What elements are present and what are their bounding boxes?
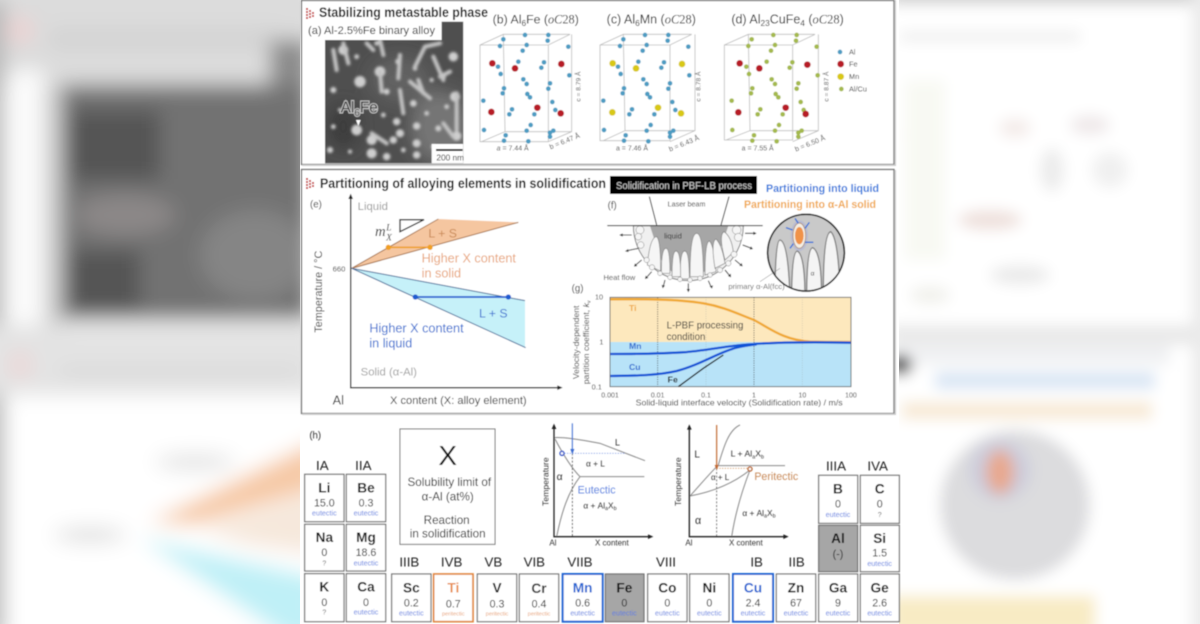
diagram: melt pool f: [603, 197, 844, 298]
arrows: heat flow: [619, 232, 757, 292]
crystal structure: Al6Mn: a = 7.46 Å: [616, 144, 648, 153]
group labels: IA: [316, 458, 329, 473]
chart: partition coefficient g: condition: [667, 332, 705, 343]
crystal structure: Al6Mn: [600, 12, 703, 154]
legend: atom types: Mn: [849, 72, 859, 81]
cell: Co: 0: [664, 597, 670, 609]
cell: Mg: [346, 524, 386, 571]
cell: Al: [819, 525, 858, 572]
cell: Sc: 0.2: [404, 597, 419, 609]
crystal structure: Al23CuFe4: [724, 12, 844, 154]
key box: X: in solidification: [410, 528, 486, 541]
chart: eutectic diagram: L: [615, 438, 620, 448]
legend: atom types: [837, 47, 867, 93]
inset: dendrite magnified: [768, 214, 844, 298]
axes: [351, 197, 559, 388]
cell: Fe: 0: [621, 597, 627, 609]
chart: eutectic diagram: Al: [549, 539, 557, 548]
crystal structure: Al6Fe: 6: [521, 18, 526, 28]
chart: peritectic diagram: a: [752, 454, 755, 460]
chart: eutectic diagram: X content: [595, 539, 630, 548]
cell: Na: 0: [321, 547, 327, 559]
slope marker: [375, 220, 424, 243]
curve: Mn: [610, 342, 851, 354]
chart: peritectic diagram: a: [764, 514, 767, 520]
cell: Cu: Cu: [744, 580, 762, 595]
legend: atom types: Fe: [849, 59, 858, 68]
chart: phase diagram e: Liquid: [358, 201, 388, 213]
chart: partition coefficient g: (g): [572, 284, 583, 295]
cell: Zn: [776, 574, 816, 622]
chart: peritectic diagram: Peritectic: [754, 471, 799, 483]
chart: peritectic diagram: α + L: [711, 473, 730, 482]
group labels: IVA: [867, 459, 888, 474]
chart: peritectic diagram: L: [694, 450, 700, 461]
crystal structure: Al23CuFe4: c = 8.87 Å: [821, 71, 830, 102]
cell: Li: eutectic: [312, 510, 337, 518]
label: panel a: (a) Al-2.5%Fe binary alloy: [308, 25, 435, 37]
cell: Li: Li: [318, 480, 330, 495]
chart: partition coefficient g: 1: [599, 338, 603, 347]
panel: partitioning of alloying elements: [302, 170, 896, 415]
cell: V: [477, 574, 517, 622]
cell: Cu: eutectic: [741, 610, 766, 618]
chart: partition coefficient g: Solid-liquid interface velocity (Solidification rate) / m/s: [636, 398, 843, 408]
chart: peritectic diagram: [673, 424, 799, 548]
cell: Zn: eutectic: [784, 610, 809, 618]
cell: Ge: Ge: [871, 580, 889, 595]
cell: Na: Na: [316, 530, 333, 545]
chart: phase diagram e: [310, 194, 563, 407]
cell: Sc: [392, 574, 431, 622]
icon: red dots bullet: [306, 8, 314, 19]
blurred background: left side: [0, 0, 320, 624]
badge: solidification in PBF-LB process: Solidification in PBF-LB process: [616, 181, 752, 192]
curve: Fe: [678, 355, 723, 387]
diagram: melt pool f: Laser beam: [668, 200, 705, 208]
group labels: VB: [484, 555, 502, 570]
chart: peritectic diagram: Al: [685, 539, 693, 548]
chart: partition coefficient g: 0.1: [592, 383, 602, 392]
chart: eutectic diagram: b: [614, 506, 617, 512]
cell: C: ?: [878, 512, 882, 519]
chart: peritectic diagram: α + Al: [742, 508, 764, 518]
chart: peritectic diagram: b: [761, 454, 764, 460]
callout: Al6Fe: Al: [341, 100, 354, 117]
diagram: melt pool f: primary α-Al(fcc): [728, 282, 785, 291]
cell: Mg: 18.6: [356, 547, 376, 559]
cell: Al: Al: [831, 531, 845, 546]
cell: K: K: [319, 580, 329, 595]
chart: peritectic diagram: Temperature: [673, 457, 683, 506]
panel: periodic table h: [305, 423, 899, 622]
cell: Si: Si: [873, 531, 886, 546]
chart: partition coefficient g: Velocity-dependent: [571, 305, 581, 379]
chart: phase diagram e: X content (X: alloy element): [390, 395, 527, 407]
chart: eutectic diagram: a: [605, 506, 608, 512]
cell: Ni: Ni: [703, 580, 716, 595]
key box: X: [400, 429, 495, 544]
heading: partitioning: Partitioning of alloying elements in solidification: [320, 176, 606, 191]
legend: partitioning into solid: Partitioning into α-Al solid: [744, 199, 876, 211]
cell: Zn: Zn: [788, 580, 804, 595]
chart: peritectic diagram: b: [773, 514, 776, 520]
chart: phase diagram e: (e): [310, 200, 322, 211]
crystal structure: Al23CuFe4: 23: [760, 18, 770, 28]
cell: Al: (-): [833, 549, 843, 561]
chart: eutectic diagram: α: [557, 472, 563, 483]
crystal structure: Al6Fe: [480, 12, 583, 153]
crystal structure: Al23CuFe4: 4: [800, 18, 805, 28]
cell: Ni: [690, 574, 729, 622]
cell: Ge: eutectic: [867, 610, 892, 618]
cell: Mn: Mn: [573, 580, 593, 595]
key box: X: Reaction: [424, 514, 470, 527]
chart: phase diagram e: 660: [333, 265, 345, 274]
cell: Li: 15.0: [314, 498, 335, 510]
crystal structure: Al6Fe: b = 6.47 Å: [548, 131, 581, 151]
curve: Cu: [610, 344, 757, 376]
chart: partition coefficient g: 0.001: [601, 393, 619, 400]
crystal structure: Al6Fe: (b) Al: [493, 12, 521, 26]
blue region L+S: [352, 268, 526, 348]
chart: partition coefficient g: Cu: [629, 362, 641, 372]
cell: C: 0: [877, 499, 883, 511]
group labels: [316, 458, 888, 570]
chart: partition coefficient g: v: [586, 300, 592, 303]
key box: X: X: [438, 440, 457, 471]
crystal structure: Al6Mn: oC28): [665, 12, 696, 26]
cell: Mn: [563, 574, 603, 622]
blue region L+S: L + S: [479, 307, 508, 321]
key box: X: α-Al (at%): [422, 491, 474, 504]
cell: Li: [305, 474, 344, 522]
chart: eutectic diagram: Temperature: [540, 457, 550, 506]
cell: Cr: [519, 574, 559, 622]
group labels: IIIA: [826, 459, 846, 474]
cell: Si: [860, 525, 899, 572]
chart: eutectic diagram: [540, 423, 653, 548]
cell: B: B: [833, 481, 843, 496]
chart: partition coefficient g: 0.1: [701, 393, 711, 400]
chart: partition coefficient g: 0.01: [651, 393, 665, 400]
chart: phase diagram e: Temperature / °C: [313, 251, 325, 333]
crystal structure: Al23CuFe4: (: [805, 12, 813, 26]
chart: partition coefficient g: Mn: [629, 341, 641, 351]
cell: Ga: eutectic: [826, 610, 851, 618]
cell: K: 0: [321, 597, 327, 609]
slope marker: X: [385, 233, 392, 243]
cell: Cr: peritectic: [528, 612, 550, 618]
crystal structure: Al6Fe: c = 8.79 Å: [574, 71, 583, 102]
cell: Ti: [434, 574, 473, 622]
group labels: VIB: [524, 555, 545, 570]
callout: Al6Fe: [341, 100, 378, 126]
cell: Ni: 0: [706, 597, 712, 609]
cell: Ti: Ti: [447, 580, 459, 595]
cell: Sc: Sc: [403, 580, 420, 595]
crystal structure: Al6Mn: (c) Al: [607, 12, 635, 26]
cell: Ge: [860, 574, 899, 622]
chart: partition coefficient g: 1: [752, 393, 756, 400]
panel: periodic table h: (h): [309, 430, 321, 441]
cell: Co: Co: [658, 580, 676, 595]
cell: C: [860, 475, 899, 523]
legend: atom types: Al/Cu: [849, 84, 867, 93]
cell: Cr: 0.4: [532, 599, 546, 611]
badge: solidification in PBF-LB process: [610, 176, 757, 194]
chart: peritectic diagram: X: [767, 508, 773, 518]
chart: partition coefficient g: 10: [798, 393, 806, 400]
cell: Si: 1.5: [872, 548, 887, 560]
chart: phase diagram e: Higher X content: [369, 322, 464, 336]
chart: eutectic diagram: α + L: [586, 459, 605, 469]
cell: V: V: [492, 580, 502, 595]
chart: partition coefficient g: Ti: [629, 303, 637, 313]
chart: partition coefficient g: 10: [595, 293, 603, 302]
chart: phase diagram e: Al: [333, 393, 344, 407]
inset: dendrite magnified: α: [811, 271, 815, 278]
cell: Fe: [605, 574, 644, 622]
chart: phase diagram e: in solid: [422, 267, 461, 281]
group labels: IIB: [789, 555, 805, 570]
cell: B: 0: [835, 499, 841, 511]
cell: Ga: 9: [835, 597, 841, 609]
chart: partition coefficient g: L-PBF processing: [667, 320, 743, 331]
cell: Ti: 0.7: [446, 599, 461, 611]
chart: eutectic diagram: α + Al: [583, 500, 605, 510]
cell: Na: ?: [322, 560, 326, 567]
cell: Co: [648, 574, 687, 622]
cell: K: [305, 574, 344, 622]
cell: V: 0.3: [490, 599, 504, 611]
crystal structure: Al23CuFe4: (d) Al: [731, 12, 760, 26]
chart: partition coefficient g: [571, 284, 857, 408]
chart: peritectic diagram: X content: [729, 539, 764, 548]
cell: Be: eutectic: [354, 510, 379, 518]
slope marker: L: [385, 223, 391, 233]
cell: K: ?: [322, 610, 326, 617]
callout: Al6Fe: Fe: [360, 100, 378, 117]
cell: Cu: [733, 574, 773, 622]
legend: atom types: Al: [849, 47, 856, 56]
group labels: IB: [750, 555, 763, 570]
cell: Sc: eutectic: [399, 610, 424, 618]
crystal structure: Al23CuFe4: CuFe: [770, 12, 800, 26]
chart: partition coefficient g: partition coefficient, k: [581, 303, 591, 384]
chart: peritectic diagram: X: [755, 449, 761, 459]
diagram: melt pool f: (f): [608, 200, 617, 211]
cell: Zn: 67: [790, 597, 802, 609]
chart: phase diagram e: Solid (α-Al): [361, 367, 417, 379]
group labels: IVB: [441, 555, 463, 570]
cell: Be: Be: [357, 480, 375, 495]
key box: X: Solubility limit of: [408, 476, 492, 489]
crystal structure: Al6Fe: a = 7.44 Å: [497, 144, 529, 153]
cell: Mn: 0.6: [575, 597, 590, 609]
chart: partition coefficient g: Fe: [668, 374, 678, 384]
cell: Co: eutectic: [655, 610, 680, 618]
cell: Mg: Mg: [356, 530, 376, 545]
diagram: melt pool f: liquid: [664, 231, 682, 240]
crystal structure: Al6Mn: 6: [635, 18, 640, 28]
crystal structure: Al23CuFe4: a = 7.55 Å: [742, 144, 774, 153]
crystal structure: Al6Mn: c = 8.78 Å: [694, 71, 703, 102]
cell: Ti: peritectic: [442, 612, 465, 618]
scale bar: 200 nm: [436, 153, 464, 163]
cell: Mg: eutectic: [354, 559, 379, 567]
chart: eutectic diagram: Eutectic: [578, 484, 616, 496]
blurred background: right side: [888, 0, 1200, 624]
cell: B: [819, 475, 858, 523]
group labels: VIII: [656, 555, 676, 570]
cell: Ni: eutectic: [697, 610, 722, 618]
chart: phase diagram e: Higher X content: [422, 252, 516, 266]
micrograph: Al6Fe: [323, 20, 470, 165]
curve: Ti: [610, 299, 851, 342]
panel: stabilizing metastable phase: [302, 0, 896, 166]
cell: Mn: eutectic: [570, 610, 595, 618]
cell: Be: [346, 474, 386, 522]
orange region L+S: [352, 219, 518, 268]
cell: Cu: 2.4: [746, 597, 760, 609]
cell: Ge: 2.6: [872, 597, 887, 609]
group labels: VIIB: [567, 555, 593, 570]
group labels: IIA: [355, 458, 372, 473]
cell: Fe: eutectic: [612, 610, 637, 618]
cell: B: eutectic: [826, 511, 851, 519]
chart: peritectic diagram: α: [695, 515, 701, 527]
crystal structure: Al23CuFe4: oC28): [813, 12, 844, 26]
cell: Si: eutectic: [867, 560, 892, 568]
cell: Na: [305, 524, 344, 571]
chart: peritectic diagram: L + Al: [731, 449, 752, 459]
cell: V: peritectic: [486, 612, 508, 618]
white central page: [300, 0, 899, 624]
cell: Ca: [346, 574, 386, 622]
crystal structure: Al6Fe: Fe (: [526, 12, 549, 26]
cell: Ca: eutectic: [354, 609, 379, 617]
cell: Ga: Ga: [829, 580, 848, 595]
icon: red dots bullet: [306, 178, 314, 189]
heading: stabilizing metastable phase: Stabilizing metastable phase: [319, 5, 488, 20]
orange region L+S: L + S: [428, 227, 457, 241]
diagram: melt pool f: Heat flow: [603, 273, 636, 282]
chart: phase diagram e: in liquid: [369, 337, 412, 351]
callout: Al6Fe: 6: [354, 108, 360, 119]
slope marker: m: [375, 224, 386, 240]
cell: Cr: Cr: [531, 581, 547, 596]
crystal structure: Al6Mn: b = 6.43 Å: [667, 133, 701, 154]
crystal structure: Al6Fe: oC28): [548, 12, 579, 26]
cell: Be: 0.3: [359, 498, 373, 510]
chart: partition coefficient g: 100: [845, 393, 857, 400]
legend: partitioning into liquid: Partitioning into liquid: [766, 183, 879, 195]
cell: Ga: [819, 574, 858, 622]
crystal structure: Al6Mn: Mn (: [640, 12, 666, 26]
cell: Fe: Fe: [616, 580, 633, 595]
cell: Ca: 0: [363, 597, 369, 609]
crystal structure: Al23CuFe4: b = 6.50 Å: [793, 133, 827, 154]
chart: eutectic diagram: X: [608, 500, 614, 510]
cell: Ca: Ca: [357, 580, 375, 595]
cell: C: C: [875, 481, 885, 496]
group labels: IIIB: [399, 555, 419, 570]
